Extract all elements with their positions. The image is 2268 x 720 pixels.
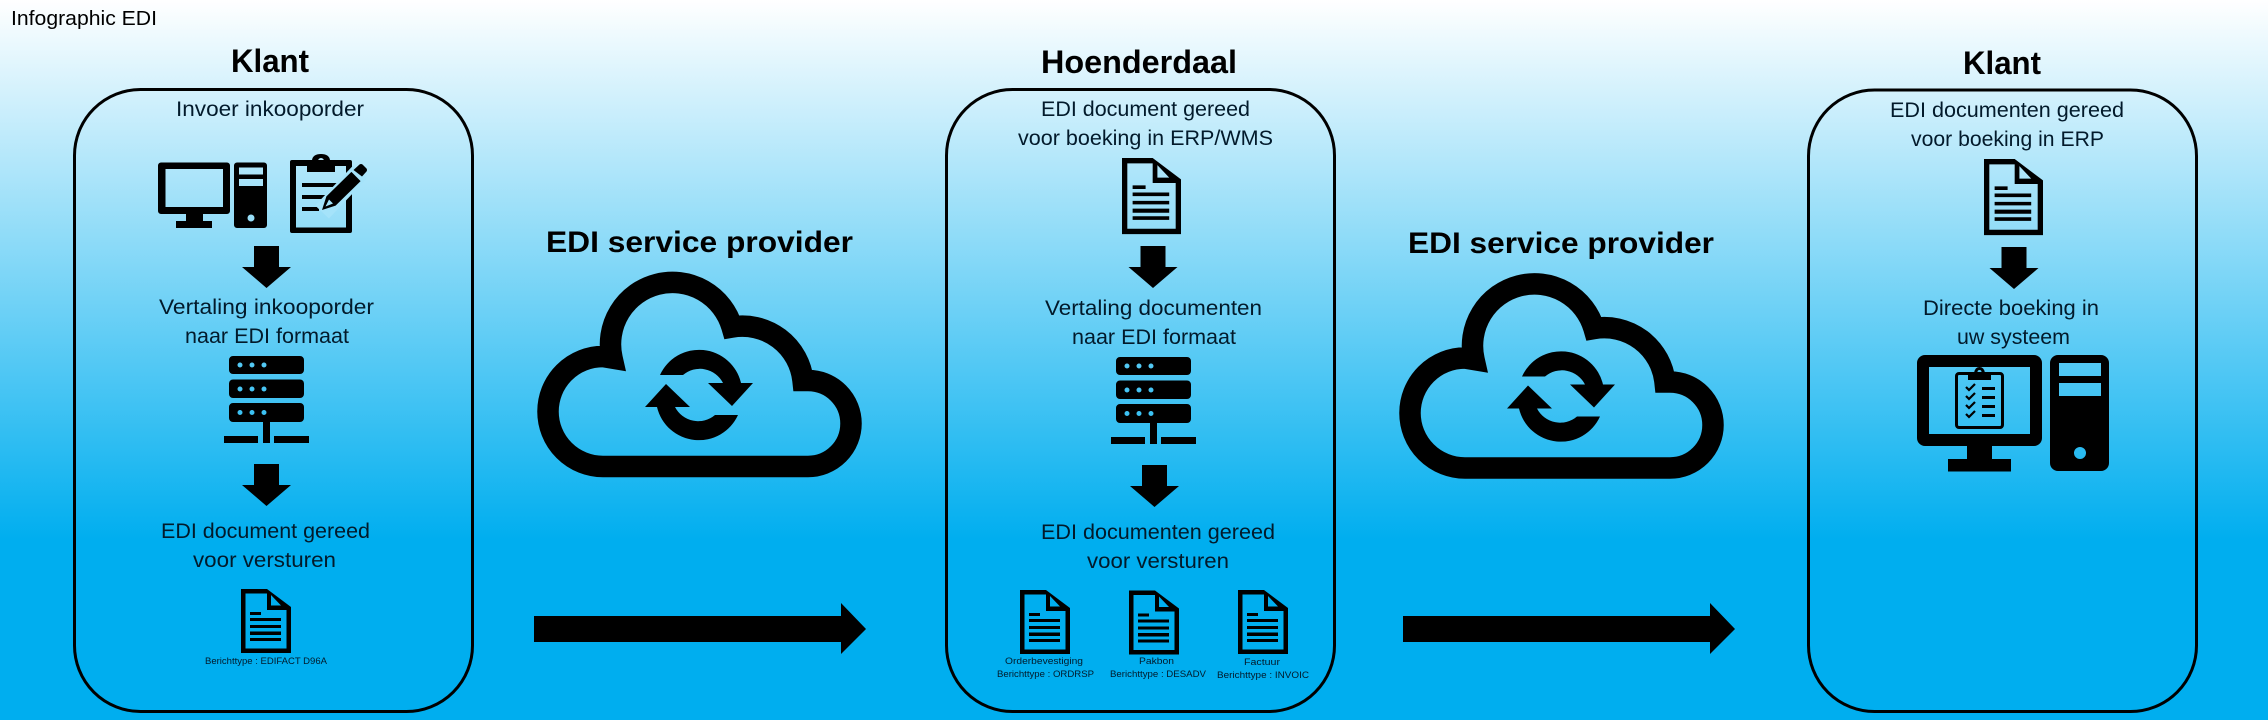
text: pakbon: Berichttype : DESADV [1110, 669, 1206, 679]
text: factuur: Factuur [1244, 657, 1280, 667]
arrow: down 1 [242, 246, 291, 288]
text: EDI document gereed voor boeking [1018, 98, 1273, 150]
icon: document large [1984, 159, 2043, 235]
panel: Klant inkooporder [74, 90, 472, 712]
text: orderbevestiging: Orderbevestiging [1005, 656, 1083, 666]
text: EDI documenten gereed: voor versturen [1087, 550, 1229, 573]
heading: Klant left: Klant [231, 43, 309, 79]
arrow: down 2 [242, 464, 291, 506]
text: pakbon [1110, 656, 1206, 679]
text: directe boeking: uw systeem [1957, 326, 2070, 349]
text: berichttype: Berichttype : EDIFACT D96A [205, 656, 327, 666]
arrow: down 3 [1128, 246, 1178, 288]
arrow: long right 2 [1403, 603, 1735, 654]
icon: cloud sync 1 [548, 282, 851, 466]
icon: document large [1122, 158, 1181, 234]
icon: computer with checklist [1917, 355, 2109, 472]
text: vertaling documenten: Vertaling documenten [1045, 297, 1262, 320]
heading: Hoenderdaal: Hoenderdaal [1041, 44, 1237, 80]
heading: Klant right: Klant [1963, 45, 2041, 81]
text: EDI documenten gereed voor boeking: EDI documenten gereed [1890, 99, 2124, 122]
text: vertaling inkooporder: naar EDI formaat [185, 325, 349, 348]
text: EDI document gereed voor boeking: EDI document gereed [1041, 98, 1250, 121]
text: EDI documenten gereed voor boeking: voor boeking in ERP [1911, 128, 2104, 151]
icon: document factuur [1238, 590, 1288, 654]
text: invoer inkooporder: Invoer inkooporder [176, 98, 364, 121]
text: vertaling inkooporder [159, 296, 374, 348]
text: vertaling inkooporder: Vertaling inkooporder [159, 296, 374, 319]
heading: EDI service provider 1: EDI service provider [546, 226, 853, 259]
heading: EDI service provider 2: EDI service provider [1408, 227, 1714, 260]
text: EDI documenten gereed voor boeking [1890, 99, 2124, 151]
icon: clipboard with pencil [290, 154, 367, 233]
icon: server [224, 356, 309, 443]
icon: document orderbevestiging [1020, 590, 1070, 654]
text: EDI document gereed [161, 520, 370, 572]
icon: checklist clipboard [1956, 367, 2002, 428]
text: factuur: Berichttype : INVOIC [1217, 670, 1310, 680]
text: EDI document gereed: EDI document gereed [161, 520, 370, 543]
text: directe boeking: Directe boeking in [1923, 297, 2099, 320]
text: vertaling documenten [1045, 297, 1262, 349]
text: EDI document gereed: voor versturen [193, 549, 336, 572]
icon: desktop computer [158, 162, 267, 228]
text: factuur [1217, 657, 1310, 680]
icon: cloud sync 2 [1410, 284, 1713, 468]
text: EDI document gereed voor boeking: voor boeking in ERP/WMS [1018, 127, 1273, 150]
text: vertaling documenten: naar EDI formaat [1072, 326, 1236, 349]
arrow: down 5 [1990, 247, 2038, 289]
text: orderbevestiging: Berichttype : ORDRSP [997, 669, 1094, 679]
title: Infographic EDI [11, 8, 157, 30]
panel: Klant ontvangst [1808, 90, 2196, 712]
icon: document [241, 589, 291, 653]
icon: server [1111, 357, 1196, 444]
text: pakbon: Pakbon [1139, 656, 1174, 666]
arrow: down 4 [1130, 465, 1179, 507]
text: EDI documenten gereed [1041, 521, 1275, 573]
text: EDI documenten gereed: EDI documenten gereed [1041, 521, 1275, 544]
text: directe boeking [1923, 297, 2099, 349]
icon: document pakbon [1129, 590, 1179, 654]
text: orderbevestiging [997, 656, 1094, 679]
arrow: long right 1 [534, 603, 866, 654]
panel: Hoenderdaal [946, 90, 1334, 712]
